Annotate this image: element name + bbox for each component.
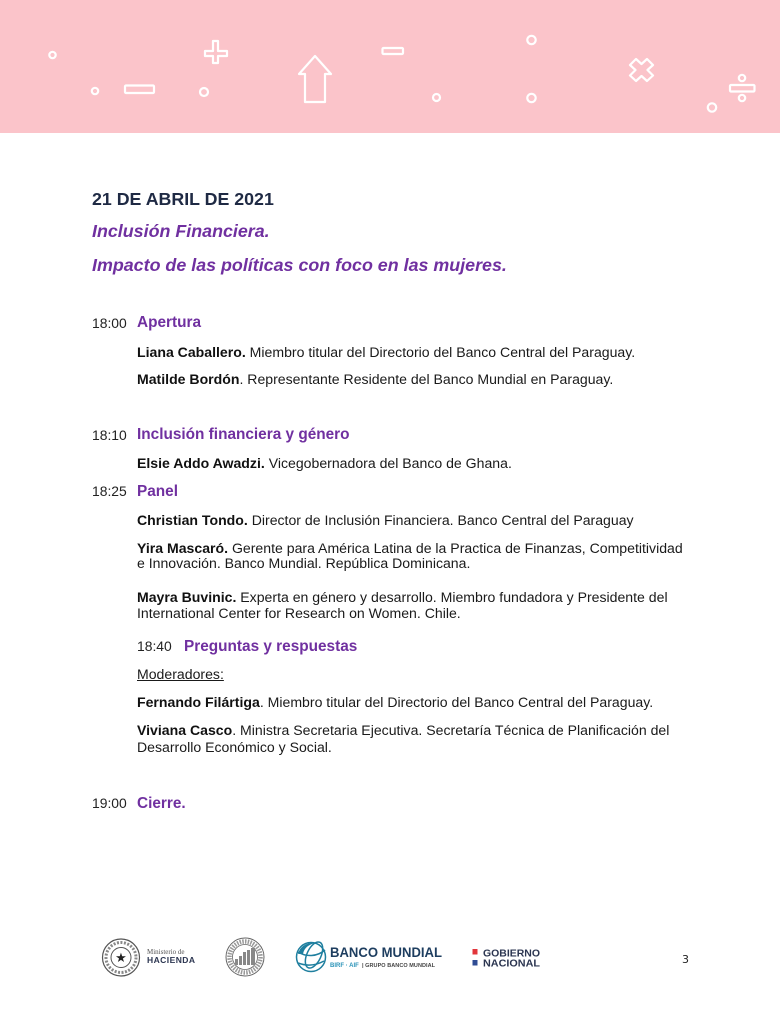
date heading: 21 DE ABRIL DE 2021 <box>92 189 274 209</box>
title: Impacto de las políticas con foco en las mujeres. <box>92 255 507 275</box>
logo: Ministerio de Hacienda: Ministerio de <box>147 948 185 956</box>
agenda: preguntas y respuestas: Preguntas y respuestas <box>184 638 357 655</box>
agenda: apertura <box>92 314 635 387</box>
agenda: preguntas y respuestas <box>137 638 669 755</box>
agenda: panel: 18:25 <box>92 483 127 499</box>
logo: Ministerio de Hacienda: HACIENDA <box>147 955 195 965</box>
agenda: preguntas y respuestas: Moderadores: <box>137 666 224 682</box>
agenda: preguntas y respuestas: Fernando Filártiga. Miembro titular del Directorio del Banco Central del Paraguay. <box>137 694 653 710</box>
agenda: panel <box>92 483 683 621</box>
logo: Banco Mundial: | GRUPO BANCO MUNDIAL <box>362 963 436 969</box>
logo: Banco Mundial <box>296 941 442 972</box>
logo: Gobierno Nacional <box>472 948 540 970</box>
agenda: panel: Panel <box>137 483 178 500</box>
title <box>92 221 507 275</box>
agenda: panel: Christian Tondo. Director de Inclusión Financiera. Banco Central del Paraguay <box>137 512 634 528</box>
agenda: cierre <box>92 795 186 812</box>
agenda: apertura: Liana Caballero. Miembro titular del Directorio del Banco Central del Paraguay. <box>137 344 635 360</box>
agenda: panel: International Center for Research on Women. Chile. <box>137 605 461 621</box>
agenda: cierre: 19:00 <box>92 795 127 811</box>
title: Inclusión Financiera. <box>92 221 270 241</box>
logo: Gobierno Nacional: GOBIERNO <box>483 948 540 960</box>
agenda: apertura: Matilde Bordón. Representante Residente del Banco Mundial en Paraguay. <box>137 371 613 387</box>
agenda: inclusión financiera y género: Inclusión financiera y género <box>137 426 350 443</box>
agenda: preguntas y respuestas: 18:40 <box>137 638 172 654</box>
agenda: panel: Mayra Buvinic. Experta en género y desarrollo. Miembro fundadora y Presidente del <box>137 589 668 605</box>
logo: Banco Central del Paraguay <box>226 938 264 976</box>
logo: Ministerio de Hacienda <box>102 938 195 977</box>
agenda: preguntas y respuestas: Desarrollo Económico y Social. <box>137 739 332 755</box>
logo: Gobierno Nacional: NACIONAL <box>483 958 540 970</box>
agenda: preguntas y respuestas: Viviana Casco. Ministra Secretaria Ejecutiva. Secretaría Técnica de Planificación del <box>137 722 669 738</box>
agenda: inclusión financiera y género <box>92 426 512 471</box>
header banner <box>0 0 780 133</box>
agenda: inclusión financiera y género: 18:10 <box>92 427 127 443</box>
agenda: panel: Yira Mascaró. Gerente para América Latina de la Practica de Finanzas, Competitividad <box>137 540 683 556</box>
logo: Banco Mundial: BIRF · AIF <box>330 963 359 969</box>
agenda: inclusión financiera y género: Elsie Addo Awadzi. Vicegobernadora del Banco de Ghana. <box>137 455 512 471</box>
agenda: apertura: Apertura <box>137 314 201 331</box>
logo: Banco Mundial: BANCO MUNDIAL <box>330 945 442 960</box>
logo: Ministerio de Hacienda: ★ <box>115 951 127 966</box>
agenda: panel: e Innovación. Banco Mundial. República Dominicana. <box>137 555 470 571</box>
agenda: cierre: Cierre. <box>137 795 186 812</box>
agenda: apertura: 18:00 <box>92 315 127 331</box>
page number: 3 <box>682 953 689 966</box>
